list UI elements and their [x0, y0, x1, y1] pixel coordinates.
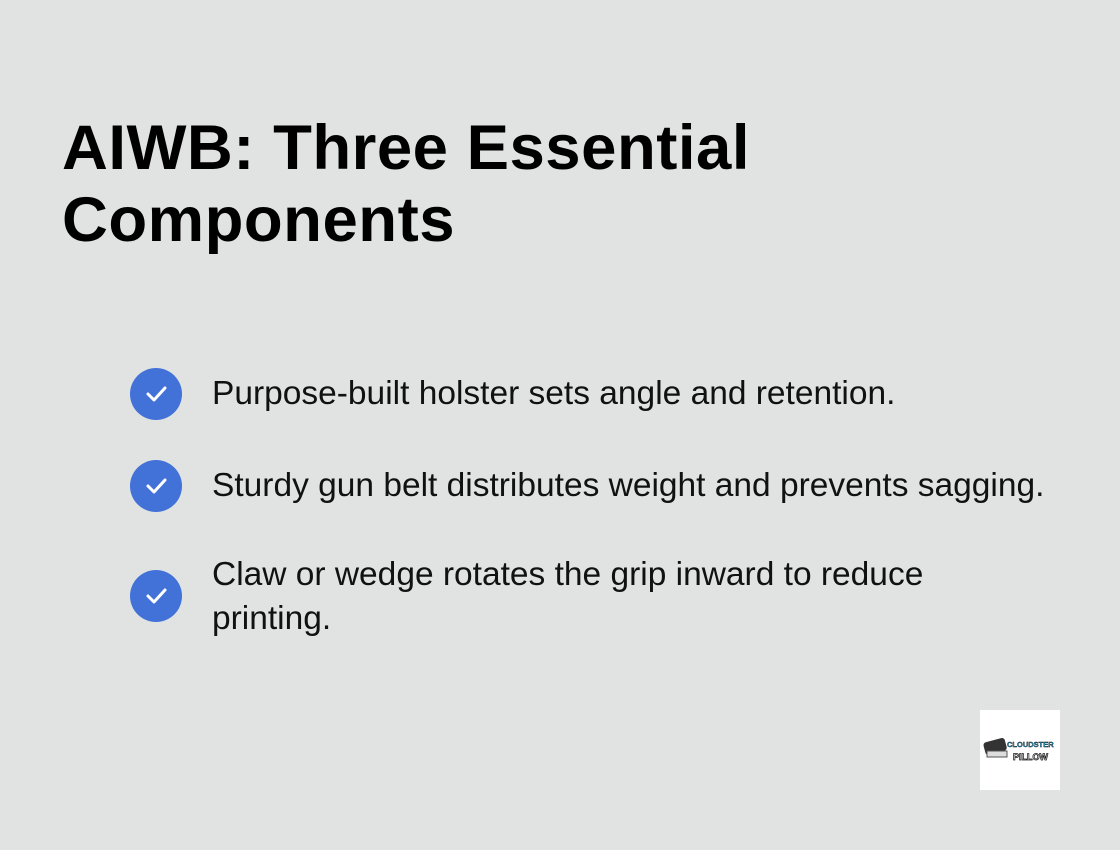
text: Sturdy gun belt distributes weight and prevents sagging.: [212, 467, 1044, 504]
icon: check: [130, 368, 182, 420]
item 2: [130, 460, 1044, 512]
title: AIWB: Three Essential: [62, 113, 750, 183]
text: printing.: [212, 600, 331, 637]
title: Components: [62, 185, 455, 255]
text: Purpose-built holster sets angle and retention.: [212, 375, 895, 412]
title: [62, 113, 750, 255]
text: Claw or wedge rotates the grip inward to reduce: [212, 556, 923, 593]
item 1: [130, 368, 895, 420]
logo: [980, 710, 1060, 790]
text: [212, 556, 923, 637]
logo: CLOUDSTER: [1007, 740, 1054, 749]
icon: check: [130, 570, 182, 622]
item 3: [130, 556, 923, 637]
logo: PILLOW: [1013, 752, 1048, 762]
icon: check: [130, 460, 182, 512]
